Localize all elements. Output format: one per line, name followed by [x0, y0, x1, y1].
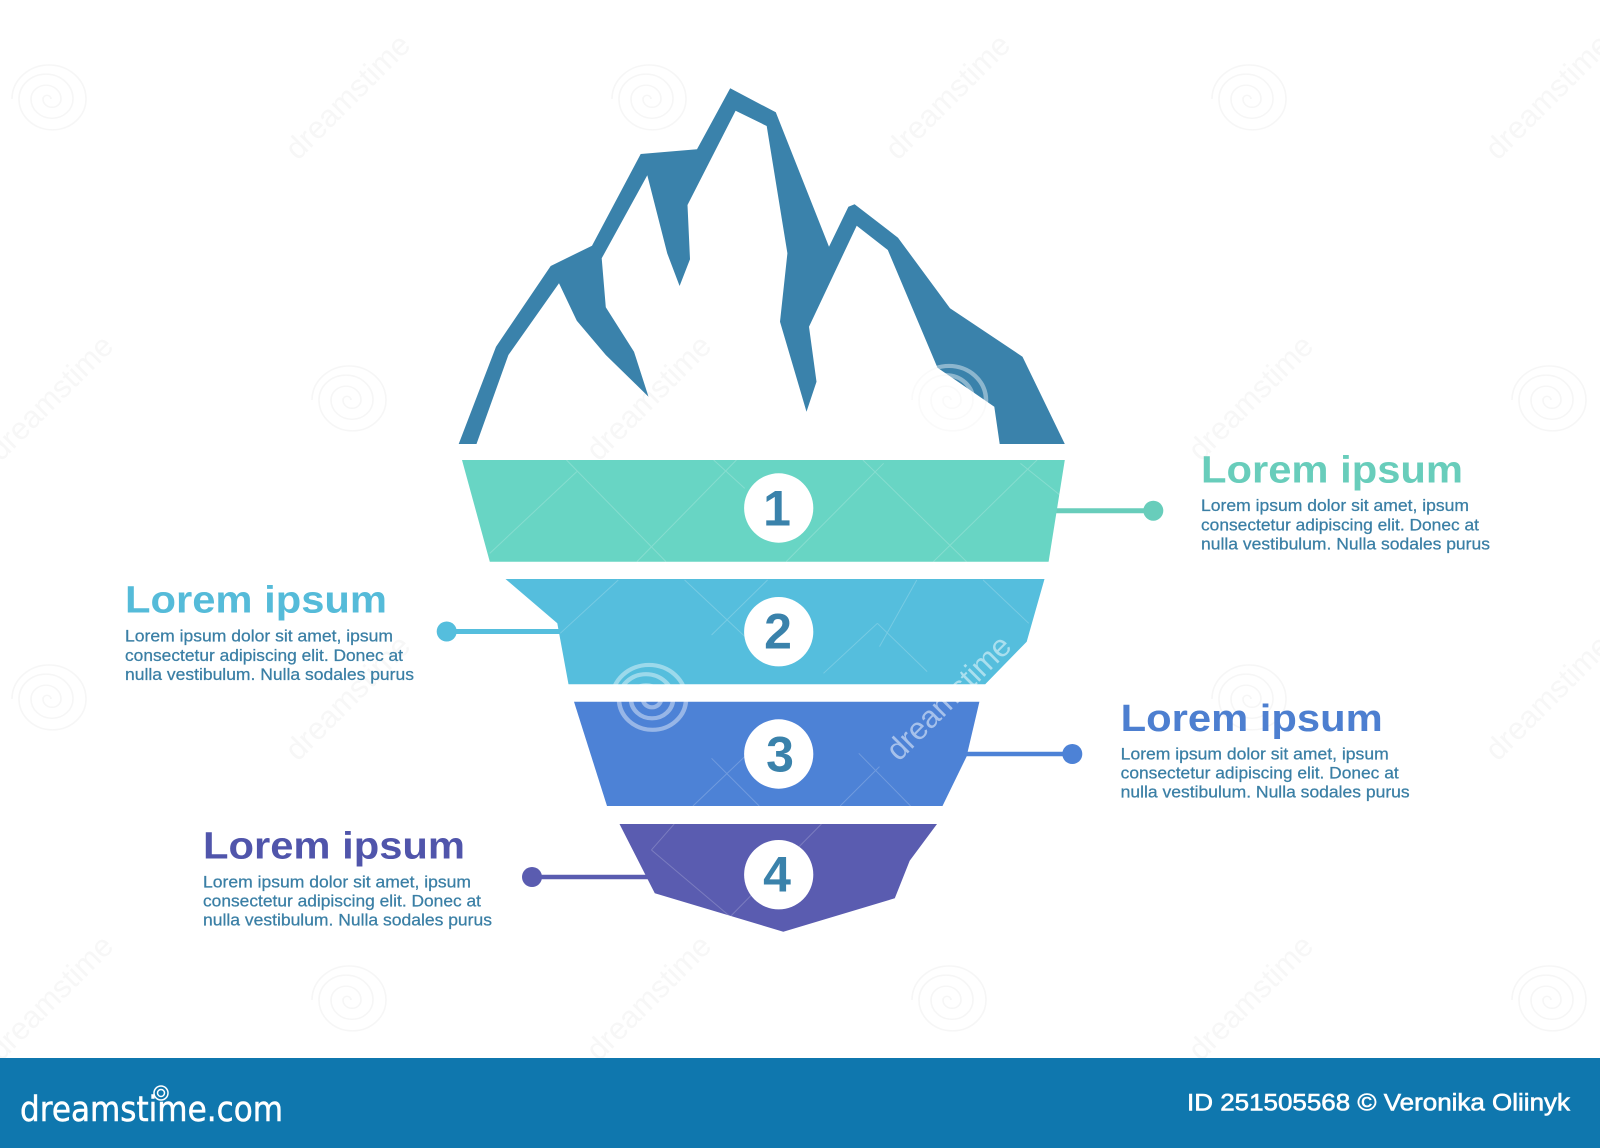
band 2 [506, 579, 1044, 684]
number badge 2: 2 [764, 603, 792, 659]
footer logo text: dreamstime.com [20, 1090, 283, 1130]
connector 1 [1055, 501, 1163, 521]
text block 1: nulla vestibulum. Nulla sodales purus [1201, 535, 1490, 553]
text block 1: Lorem ipsum [1201, 449, 1463, 491]
watermark pattern: grey: dreamstime [1181, 928, 1320, 1067]
number badge 3 [744, 719, 813, 789]
text block 4: consectetur adipiscing elit. Donec at [203, 893, 481, 911]
number badge 4: 4 [763, 847, 791, 903]
watermark pattern: grey: dreamstime [278, 27, 417, 166]
text block 2: Lorem ipsum [125, 580, 387, 622]
number badge 3: 3 [766, 727, 794, 783]
text block 4: Lorem ipsum [203, 825, 465, 867]
watermark pattern: grey: dreamstime [878, 27, 1017, 166]
icon: logo spiral [154, 1086, 168, 1100]
footer bar [0, 1058, 1600, 1148]
connector 3 [965, 744, 1082, 764]
text block 3: nulla vestibulum. Nulla sodales purus [1121, 784, 1410, 802]
band 4 [620, 824, 937, 932]
text block 4: nulla vestibulum. Nulla sodales purus [203, 912, 492, 930]
text block 1 [1201, 449, 1490, 553]
watermark pattern: grey: dreamstime [278, 628, 417, 767]
connector 4 [522, 867, 650, 887]
number badge 2 [744, 597, 813, 666]
text block 2: consectetur adipiscing elit. Donec at [125, 647, 403, 665]
watermark pattern: grey: dreamstime [1181, 328, 1320, 467]
watermark lines over bands [490, 460, 1062, 917]
number badge 4 [744, 840, 813, 909]
watermark pattern: grey: dreamstime [579, 328, 718, 467]
text block 4 [203, 825, 492, 930]
text block 3: consectetur adipiscing elit. Donec at [1121, 765, 1399, 783]
text block 1: Lorem ipsum dolor sit amet, ipsum [1201, 497, 1469, 515]
number badge 1 [744, 473, 813, 543]
text block 3: Lorem ipsum [1121, 698, 1383, 740]
text block 3 [1121, 698, 1410, 802]
iceberg tip: mountain peaks [459, 88, 1065, 444]
watermark pattern: grey: dreamstime [579, 928, 718, 1067]
footer credit: ID 251505568 © Veronika Oliinyk [1187, 1090, 1571, 1117]
band 3 [574, 702, 979, 806]
text block 1: consectetur adipiscing elit. Donec at [1201, 516, 1479, 534]
watermark over iceberg [612, 366, 1018, 767]
text block 3: Lorem ipsum dolor sit amet, ipsum [1121, 745, 1389, 763]
band 1 [462, 460, 1065, 562]
connector 2 [437, 622, 560, 642]
text block 2 [125, 580, 414, 684]
number badge 1: 1 [763, 480, 791, 536]
text block 2: Lorem ipsum dolor sit amet, ipsum [125, 628, 393, 646]
text block 2: nulla vestibulum. Nulla sodales purus [125, 666, 414, 684]
text block 4: Lorem ipsum dolor sit amet, ipsum [203, 873, 471, 891]
watermark over iceberg: dreamstime [879, 628, 1018, 767]
